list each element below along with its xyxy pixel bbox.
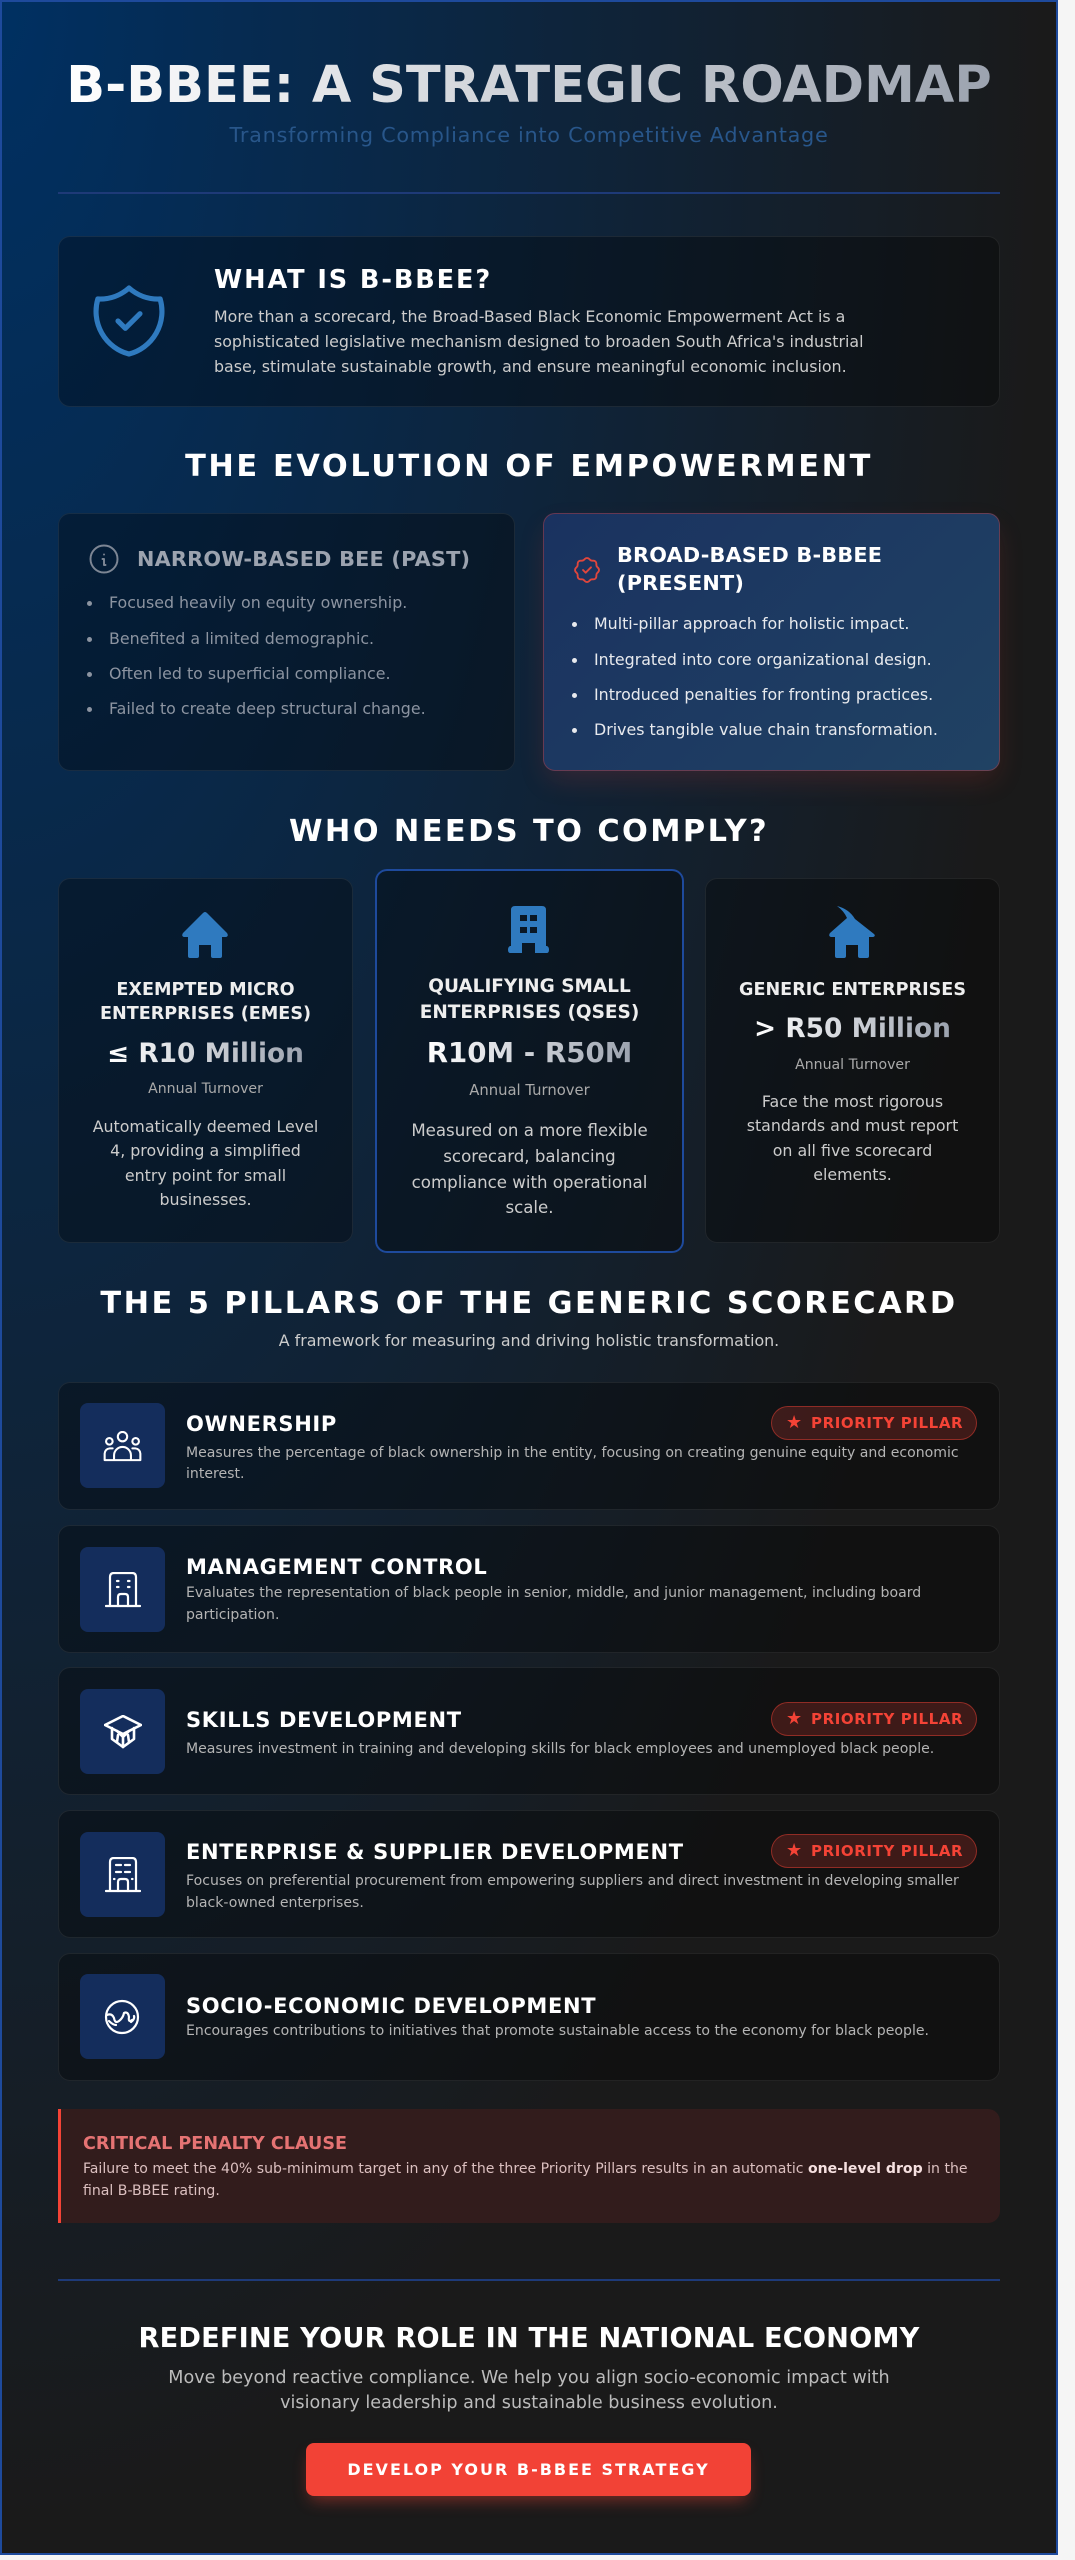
callout: critical penalty clause <box>58 2109 1000 2223</box>
badge: priority pillar: PRIORITY PILLAR <box>811 1414 963 1432</box>
icon: globe <box>80 1974 165 2059</box>
button: develop strategy <box>306 2443 751 2496</box>
heading: who needs to comply: WHO NEEDS TO COMPLY? <box>289 814 769 848</box>
text: generic description: elements. <box>813 1165 892 1184</box>
badge: priority pillar <box>771 1702 977 1736</box>
heading: five pillars: THE 5 PILLARS OF THE GENERIC SCORECARD <box>100 1286 958 1320</box>
list: narrow-based points: Benefited a limited demographic. <box>109 629 374 648</box>
icon: building <box>508 906 549 953</box>
text: generic description: on all five scorecard <box>773 1141 932 1160</box>
title: EMEs: ENTERPRISES (EMES) <box>100 1004 311 1024</box>
pillar: socio-economic development <box>58 1953 1000 2081</box>
text: enterprise description <box>186 1873 959 1911</box>
title: B-BBEE: A STRATEGIC ROADMAP <box>66 56 992 115</box>
text: definition: More than a scorecard, the Broad-Based Black Economic Empowerment Act is a <box>214 306 845 326</box>
text: EME description <box>92 1117 318 1209</box>
text: pillars intro: A framework for measuring and driving holistic transformation. <box>279 1331 779 1350</box>
text: definition: sophisticated legislative mechanism designed to broaden South Africa's industrial <box>214 332 864 350</box>
badge: priority pillar <box>771 1406 977 1440</box>
list: broad-based points <box>572 614 938 739</box>
badge: priority pillar: PRIORITY PILLAR <box>811 1842 963 1860</box>
panel: what is B-BBEE <box>58 236 1000 407</box>
list: broad-based points: Drives tangible value chain transformation. <box>594 720 938 739</box>
title: QSEs: QUALIFYING SMALL <box>428 976 631 997</box>
heading: broad-based: (PRESENT) <box>617 571 744 595</box>
badge: priority pillar: ★ <box>786 1708 802 1729</box>
list: broad-based points: Introduced penalties for fronting practices. <box>594 685 933 704</box>
heading: narrow-based: NARROW-BASED BEE (PAST) <box>137 547 470 571</box>
text: QSE description: compliance with operational <box>412 1173 647 1192</box>
heading: what is B-BBEE: WHAT IS B-BBEE? <box>214 265 492 295</box>
text: QSE description: Measured on a more flexible <box>411 1121 648 1140</box>
icon: office building <box>80 1547 165 1632</box>
icon: people group <box>80 1403 165 1488</box>
text: EME description: 4, providing a simplified <box>110 1141 301 1160</box>
heading: broad-based <box>617 543 882 595</box>
list: narrow-based points <box>87 593 426 718</box>
icon: shield check <box>94 285 164 357</box>
icon: graduation cap <box>80 1689 165 1774</box>
text: ownership description <box>186 1444 959 1482</box>
title: enterprise and supplier development: ENTERPRISE & SUPPLIER DEVELOPMENT <box>186 1840 684 1864</box>
text: socio-economic description: Encourages contributions to initiatives that promote sustainable access to the economy for black people. <box>186 2023 929 2039</box>
title: QSEs: ENTERPRISES (QSES) <box>420 1002 639 1023</box>
title: EMEs <box>100 980 311 1024</box>
value: turnover range: R10M - R50M <box>427 1036 632 1069</box>
title: generic: GENERIC ENTERPRISES <box>739 980 966 1000</box>
badge: priority pillar: PRIORITY PILLAR <box>811 1710 963 1728</box>
icon: info circle <box>90 544 118 574</box>
text: definition <box>214 306 864 376</box>
subtitle: Transforming Compliance into Competitive Advantage <box>230 123 828 147</box>
label: annual turnover: Annual Turnover <box>148 1081 263 1097</box>
text: skills description: Measures investment in training and developing skills for black employees and unemployed black people. <box>186 1741 934 1757</box>
panel: broad-based B-BBEE <box>543 513 1000 771</box>
icon: rosette check <box>574 557 600 583</box>
pillar: enterprise and supplier development <box>58 1810 1000 1938</box>
icon: house <box>182 912 228 958</box>
heading: evolution of empowerment: THE EVOLUTION OF EMPOWERMENT <box>185 449 873 484</box>
text: QSE description <box>411 1121 648 1217</box>
text: penalty details: final B-BBEE rating. <box>83 2183 220 2199</box>
icon: house with chimney <box>829 906 875 958</box>
title: QSEs <box>420 976 639 1023</box>
list: broad-based points: Multi-pillar approach for holistic impact. <box>594 614 909 633</box>
text: enterprise description: Focuses on preferential procurement from empowering suppliers and direct investment in developing smaller <box>186 1873 959 1889</box>
text: call to action: Move beyond reactive compliance. We help you align socio-economic impact with <box>168 2368 890 2388</box>
text: enterprise description: black-owned enterprises. <box>186 1895 364 1911</box>
text: QSE description: scale. <box>505 1198 554 1217</box>
label: annual turnover: Annual Turnover <box>795 1057 910 1073</box>
text: generic description <box>747 1092 958 1184</box>
text: call to action: visionary leadership and sustainable business evolution. <box>280 2392 778 2412</box>
list: narrow-based points: Failed to create deep structural change. <box>109 699 426 718</box>
value: turnover threshold: > R50 Million <box>754 1013 951 1044</box>
title: EMEs: EXEMPTED MICRO <box>116 980 295 1000</box>
label: annual turnover: Annual Turnover <box>469 1082 590 1099</box>
red accent bar <box>58 2109 61 2223</box>
title: socio-economic development: SOCIO-ECONOMIC DEVELOPMENT <box>186 1994 596 2018</box>
text: management description <box>186 1585 921 1623</box>
text: QSE description: scorecard, balancing <box>443 1147 616 1166</box>
pillar: management control <box>58 1525 1000 1653</box>
title: penalty: CRITICAL PENALTY CLAUSE <box>83 2134 347 2154</box>
list: broad-based points: Integrated into core organizational design. <box>594 650 932 669</box>
text: generic description: Face the most rigorous <box>762 1092 943 1111</box>
title: management control: MANAGEMENT CONTROL <box>186 1555 487 1579</box>
heading: broad-based: BROAD-BASED B-BBEE <box>617 543 882 567</box>
title: skills development: SKILLS DEVELOPMENT <box>186 1708 462 1732</box>
badge: priority pillar: ★ <box>786 1412 802 1433</box>
text: management description: participation. <box>186 1607 279 1623</box>
card: qualifying small enterprises <box>375 869 684 1253</box>
header divider <box>58 192 1000 194</box>
text: EME description: businesses. <box>159 1190 252 1209</box>
text: management description: Evaluates the representation of black people in senior, middle, and junior management, including board <box>186 1585 921 1601</box>
text: EME description: Automatically deemed Level <box>93 1117 318 1136</box>
list: narrow-based points: Often led to superficial compliance. <box>109 664 391 683</box>
card: exempted micro enterprises <box>58 878 353 1243</box>
badge: priority pillar <box>771 1834 977 1868</box>
text: penalty details: Failure to meet the 40% sub-minimum target in any of the three Priority Pillars results in an automatic one-level drop in the <box>83 2161 968 2177</box>
badge: priority pillar: ★ <box>786 1840 802 1861</box>
pillar: skills development <box>58 1667 1000 1795</box>
text: ownership description: interest. <box>186 1466 244 1482</box>
text: definition: base, stimulate sustainable growth, and ensure meaningful economic inclusion. <box>214 356 847 376</box>
text: penalty details <box>83 2161 968 2199</box>
list: narrow-based points: Focused heavily on equity ownership. <box>109 593 407 612</box>
pillar: ownership <box>58 1382 1000 1510</box>
text: EME description: entry point for small <box>125 1166 286 1185</box>
heading: call to action: REDEFINE YOUR ROLE IN THE NATIONAL ECONOMY <box>139 2323 919 2354</box>
footer divider <box>58 2279 1000 2281</box>
text: ownership description: Measures the percentage of black ownership in the entity, focusing on creating genuine equity and economic <box>186 1444 959 1460</box>
panel: narrow-based BEE <box>58 513 515 771</box>
title: ownership: OWNERSHIP <box>186 1412 337 1436</box>
icon: supplier building <box>80 1832 165 1917</box>
card: generic enterprises <box>705 878 1000 1243</box>
value: turnover threshold: ≤ R10 Million <box>107 1038 304 1069</box>
button: develop strategy: DEVELOP YOUR B-BBEE STRATEGY <box>347 2460 710 2479</box>
text: call to action <box>168 2368 890 2412</box>
text: generic description: standards and must report <box>747 1116 958 1135</box>
